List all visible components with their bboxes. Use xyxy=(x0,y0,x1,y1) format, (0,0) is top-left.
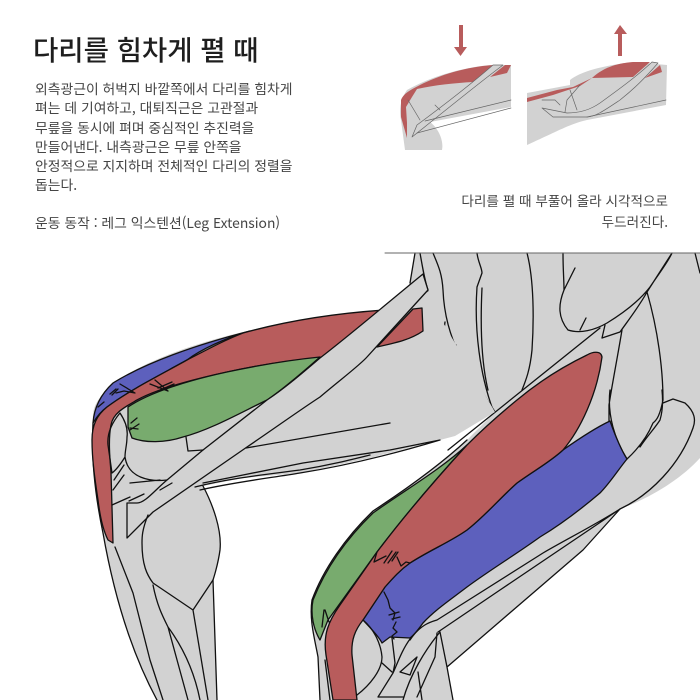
right knee structures xyxy=(325,509,620,700)
arrow: up xyxy=(614,25,627,56)
muscle: right thigh vastus medialis (green) xyxy=(312,445,467,640)
muscle: right thigh vastus lateralis (blue) xyxy=(363,421,627,643)
description text: 무릎을 동시에 펴며 중심적인 추진력을 xyxy=(35,117,254,137)
left leg outer outline xyxy=(92,423,440,700)
left leg xyxy=(92,274,495,700)
thumbnail caption: 다리를 펼 때 부풀어 올라 시각적으로 xyxy=(461,190,668,210)
description text: 안정적으로 지지하며 전체적인 다리의 정렬을 xyxy=(35,155,292,175)
thumbnail strap xyxy=(412,65,503,137)
muscle: left thigh vastus medialis (green) xyxy=(128,357,320,442)
thumbnail raised red upper xyxy=(645,65,662,78)
muscle: right thigh rectus femoris (red) xyxy=(325,352,602,700)
thumbnail red raised muscle xyxy=(527,62,650,102)
sartorius strap xyxy=(127,274,428,538)
thumbnail caption xyxy=(461,190,668,231)
patella and knee lines xyxy=(108,413,390,700)
thumbnail caption: 두드러진다. xyxy=(602,211,668,231)
thumbnail raised strap xyxy=(542,62,658,117)
right thigh outer strap line xyxy=(311,328,600,700)
left thigh and calf silhouette xyxy=(92,274,495,700)
torso muscle lines xyxy=(370,253,700,509)
title: 다리를 힘차게 펼 때 xyxy=(33,28,258,68)
muscle: left thigh upper rectus femoris (red) xyxy=(92,310,385,543)
muscle: left thigh vastus lateralis (blue) xyxy=(93,331,250,423)
thumbnail: pressed thigh xyxy=(400,65,511,150)
description text xyxy=(35,78,292,194)
description text: 외측광근이 허벅지 바깥쪽에서 다리를 힘차게 xyxy=(35,78,292,98)
exercise label: 운동 동작 : 레그 익스텐션(Leg Extension) xyxy=(35,212,280,232)
divider line xyxy=(385,252,700,254)
arrow: down xyxy=(454,25,467,56)
right leg and torso xyxy=(311,253,700,700)
thumbnail: raised thigh xyxy=(527,62,667,145)
description text: 돕는다. xyxy=(35,174,77,194)
muscle fibre marks xyxy=(322,551,410,639)
description text: 만들어낸다. 내측광근은 무릎 안쪽을 xyxy=(35,136,242,156)
calf lines xyxy=(142,515,213,700)
thumbnail red muscle upper xyxy=(490,65,511,77)
torso and right thigh silhouette xyxy=(311,253,700,700)
muscle: left thigh hip-side rectus femoris (red) xyxy=(377,308,423,347)
description text: 펴는 데 기여하고, 대퇴직근은 고관절과 xyxy=(35,97,258,117)
thumbnail red muscle xyxy=(401,65,493,138)
left muscle fibre marks xyxy=(98,380,174,430)
